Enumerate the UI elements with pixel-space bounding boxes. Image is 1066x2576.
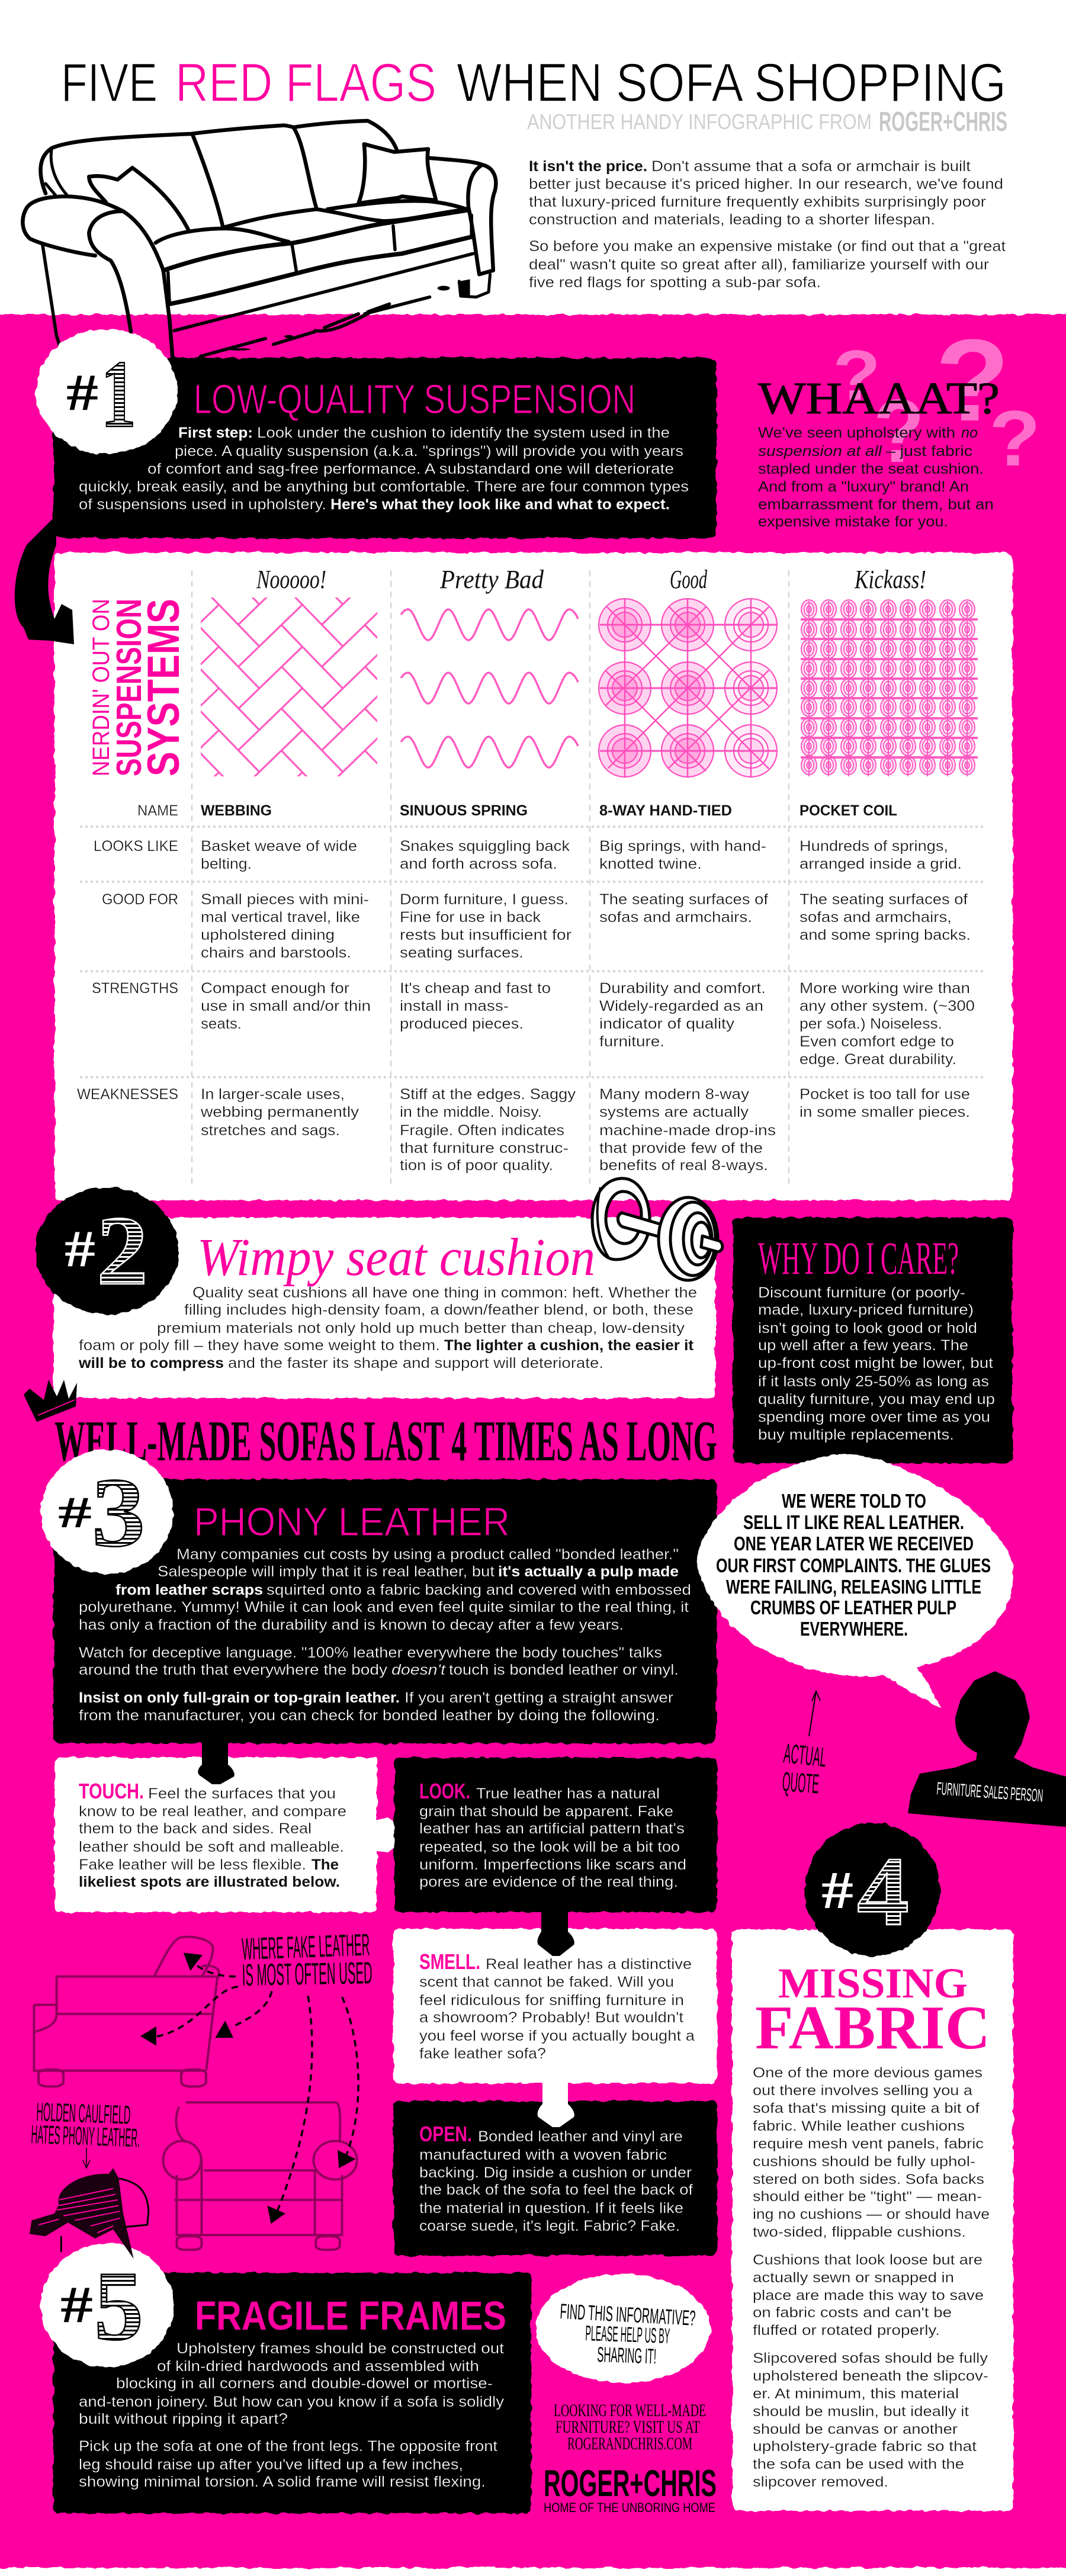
- text block: why do i care: quality furniture, you may end up: [758, 1391, 995, 1408]
- label: where fake leather is most often used: [241, 1928, 373, 1993]
- callout: please share: [535, 2274, 711, 2383]
- text block: look: LOOK.: [419, 1779, 470, 1803]
- text block: missing fabric: fabric. While leather cushions: [753, 2118, 965, 2134]
- table row labels: NAME: [137, 802, 178, 819]
- text block: look: repeated, so the look will be a bit too: [419, 1839, 680, 1855]
- body text: #2: filling includes high-density foam, a down/feather blend, or both, these: [184, 1302, 693, 1318]
- table row labels: STRENGTHS: [92, 980, 178, 997]
- badge: #2: 2: [97, 1196, 148, 1306]
- icon: crown: [24, 1380, 77, 1422]
- body text: #1: of suspensions used in upholstery.: [79, 496, 326, 513]
- text block: touch: know to be real leather, and compare: [79, 1803, 346, 1820]
- text block: missing fabric: [753, 2065, 990, 2490]
- table row labels: WEAKNESSES: [77, 1086, 178, 1103]
- table column: sinuous spring: It's cheap and fast to: [400, 980, 551, 997]
- illustration: pocket coil: [801, 600, 978, 776]
- table column: sinuous spring: in the middle. Noisy.: [400, 1104, 542, 1120]
- badge: #5: [41, 2244, 174, 2367]
- text block: open: the back of the sofa to feel the back of: [419, 2182, 693, 2198]
- body text: #1: Look under the cushion to identify the system used in the: [257, 425, 670, 441]
- table column: pocket coil: Hundreds of springs,: [800, 838, 948, 855]
- text block: why do i care: spending more over time as you: [758, 1409, 990, 1425]
- body text: #5: blocking in all corners and double-dowel or mortise-: [116, 2375, 493, 2392]
- title: FIVE: [61, 53, 158, 113]
- body text: #3: Insist on only full-grain or top-grain leather.: [79, 1690, 400, 1706]
- arrow: actual quote: [809, 1691, 820, 1736]
- logo: roger+chris: HOME OF THE UNBORING HOME: [544, 2500, 715, 2515]
- body text: #5: Upholstery frames should be constructed out: [176, 2340, 504, 2357]
- text block: missing fabric: place are made this way to save: [753, 2288, 984, 2304]
- text block: missing fabric: two-sided, flippable cushions.: [753, 2224, 966, 2240]
- column ratings: Pretty Bad: [439, 565, 544, 594]
- text block: missing fabric: Cushions that look loose but are: [753, 2252, 982, 2268]
- table column: pocket coil: The seating surfaces of: [800, 891, 968, 908]
- icon: sofa illustration: [23, 121, 496, 358]
- panel: #5 fragile frames: [53, 2273, 531, 2513]
- text block: missing fabric: on fabric costs and can't be: [753, 2305, 952, 2321]
- table column: sinuous spring: seating surfaces.: [400, 945, 524, 961]
- text block: why do i care: Discount furniture (or poorly-: [758, 1284, 965, 1301]
- text block: why do i care: up-front cost might be lower, but: [758, 1355, 993, 1371]
- table column: 8-way hand-tied: that provide few of the: [599, 1140, 763, 1157]
- badge: #2: #: [65, 1220, 95, 1278]
- callout: please share: FIND THIS INFORMATIVE?: [560, 2299, 696, 2330]
- text block: missing fabric: should be canvas or another: [753, 2421, 958, 2437]
- text block: whaaat: expensive mistake for you.: [758, 513, 948, 530]
- badge: #3: #: [58, 1488, 92, 1537]
- arrow: smell to open: [538, 2081, 574, 2127]
- intro text: It isn't the price.: [529, 158, 647, 175]
- table row labels: [77, 802, 178, 1103]
- body text: #2: Quality seat cushions all have one thing in common: heft. Whether the: [192, 1284, 697, 1301]
- badge: #3: 3: [92, 1458, 145, 1568]
- panel: #3 phony leather: [53, 1479, 717, 1743]
- panel: smell: [393, 1929, 717, 2083]
- text block: touch: them to the back and sides. Real: [79, 1820, 312, 1837]
- table column: webbing: In larger-scale uses,: [201, 1086, 345, 1103]
- table column: sinuous spring: Fine for use in back: [400, 909, 541, 926]
- text block: open: OPEN.: [419, 2122, 472, 2146]
- panel: #4 missing fabric: [732, 1823, 1013, 2511]
- text block: why do i care: isn't going to look good or hold: [758, 1320, 977, 1337]
- intro text: better just because it's priced higher. In our research, we've found: [529, 176, 1003, 192]
- table column: 8-way hand-tied: systems are actually: [599, 1104, 749, 1120]
- rotated heading: NERDIN' OUT ON: [88, 599, 114, 776]
- body text: #2: [78, 1284, 697, 1371]
- icon: question marks: ?: [874, 381, 924, 481]
- body text: #5: of kiln-dried hardwoods and assembled with: [157, 2358, 479, 2375]
- table column: sinuous spring: [400, 802, 576, 1174]
- text block: whaaat: no: [961, 425, 978, 441]
- text block: open: Bonded leather and vinyl are: [478, 2128, 683, 2145]
- text block: missing fabric: ing no cushions — or should have: [753, 2206, 990, 2222]
- text block: missing fabric: should be muslin, but ideally it: [753, 2404, 969, 2420]
- text block: look: leather has an artificial pattern that's: [419, 1820, 685, 1837]
- heading: fragile frames: FRAGILE FRAMES: [195, 2293, 506, 2339]
- text block: open: the material in question. If it feels like: [419, 2200, 683, 2217]
- intro text: deal" wasn't quite so great after all), familiarize yourself with our: [529, 256, 989, 273]
- body text: #5: Pick up the sofa at one of the front legs. The opposite front: [79, 2438, 497, 2455]
- body text: #5: showing minimal torsion. A solid frame will resist flexing.: [79, 2474, 486, 2490]
- text block: missing fabric: out there involves selling you a: [753, 2083, 973, 2099]
- table column: 8-way hand-tied: [599, 802, 776, 1174]
- table column: sinuous spring: that furniture construc-: [400, 1140, 569, 1157]
- intro text: that luxury-priced furniture frequently exhibits surprisingly poor: [529, 194, 986, 210]
- table row labels: LOOKS LIKE: [94, 838, 178, 855]
- table column: pocket coil: arranged inside a grid.: [800, 856, 962, 872]
- table column: 8-way hand-tied: 8-WAY HAND-TIED: [599, 802, 732, 819]
- subtitle: [527, 106, 1007, 137]
- text block: whaaat: – just fabric: [886, 443, 972, 460]
- table column: pocket coil: in some smaller pieces.: [800, 1104, 970, 1120]
- callout: quote bubble: [697, 1454, 1013, 1708]
- text block: look: True leather has a natural: [476, 1785, 660, 1802]
- text block: look: grain that should be apparent. Fake: [419, 1803, 673, 1820]
- badge: #5: 5: [94, 2251, 143, 2361]
- badge: #1: [36, 329, 178, 454]
- heading: whaaat: WHAAAT?: [758, 374, 1000, 423]
- table column: webbing: webbing permanently: [200, 1104, 359, 1120]
- table column: webbing: upholstered dining: [201, 927, 335, 943]
- text: QUOTE: [781, 1766, 820, 1799]
- heading: low-quality suspension: LOW-QUALITY SUSPENSION: [194, 376, 635, 422]
- text block: missing fabric: upholstered beneath the slipcov-: [753, 2368, 988, 2384]
- text block: open: [419, 2122, 693, 2234]
- table column: webbing: seats.: [201, 1016, 242, 1032]
- text: HATES PHONY LEATHER.: [31, 2120, 140, 2153]
- illustration: sofa side and armchair outlines: [34, 1937, 357, 2250]
- illustration: sinuous spring: [401, 609, 578, 767]
- table column: pocket coil: [800, 802, 975, 1120]
- title: [61, 53, 1006, 113]
- text block: missing fabric: stered on both sides. Sofa backs: [753, 2172, 984, 2188]
- badge: #3: [41, 1450, 174, 1574]
- body text: #5: and-tenon joinery. But how can you know if a sofa is solidly: [79, 2394, 505, 2410]
- badge: #4: #: [821, 1861, 853, 1920]
- table column: sinuous spring: rests but insufficient for: [400, 927, 571, 943]
- rotated heading: [88, 599, 189, 776]
- badge: #1: #: [66, 364, 98, 422]
- text block: smell: scent that cannot be faked. Will you: [419, 1974, 674, 1990]
- body text: #3: around the truth that everywhere the body: [79, 1662, 388, 1678]
- body text: #3: squirted onto a fabric backing and covered with embossed: [266, 1582, 691, 1598]
- intro text: construction and materials, leading to a shorter lifespan.: [529, 211, 935, 228]
- table column: pocket coil: and some spring backs.: [800, 927, 971, 943]
- label: actual quote: [781, 1737, 828, 1799]
- subtitle: ANOTHER HANDY INFOGRAPHIC FROM: [527, 110, 872, 134]
- text block: whaaat: And from a "luxury" brand! An: [758, 478, 969, 495]
- arrow: into touch: [198, 1741, 235, 1784]
- callout: please share: SHARING IT!: [597, 2342, 657, 2368]
- body text: #3: Watch for deceptive language. "100% leather everywhere the body touches" talks: [79, 1644, 662, 1661]
- intro text: [529, 158, 1006, 291]
- body text: #5: [79, 2340, 505, 2490]
- text block: smell: fake leather sofa?: [419, 2045, 546, 2062]
- text block: visit us: ROGERANDCHRIS.COM: [567, 2434, 692, 2453]
- text block: smell: a showroom? Probably! But wouldn't: [419, 2009, 683, 2026]
- table column: pocket coil: per sofa.) Noiseless.: [800, 1016, 942, 1032]
- table column: 8-way hand-tied: indicator of quality: [599, 1016, 735, 1032]
- body text: #1: piece. A quality suspension (a.k.a. "springs") will provide you with years: [175, 443, 683, 460]
- body text: #2: premium materials not only hold up much better than cheap, low-density: [157, 1320, 685, 1337]
- panel: suspension systems table: [54, 499, 1013, 1200]
- text block: missing fabric: require mesh vent panels, fabric: [753, 2136, 984, 2152]
- callout: quote bubble: WERE FAILING, RELEASING LITTLE: [726, 1576, 981, 1598]
- text block: visit us: FURNITURE? VISIT US AT: [556, 2417, 700, 2437]
- body text: #3: has only a fraction of the durability and is known to decay after a few years.: [79, 1617, 624, 1633]
- table column: 8-way hand-tied: sofas and armchairs.: [599, 909, 752, 926]
- text block: look: uniform. Imperfections like scars and: [419, 1856, 686, 1873]
- rotated heading: SUSPENSION: [110, 599, 149, 776]
- text: HOLDEN CAULFIELD: [36, 2098, 131, 2130]
- text block: why do i care: buy multiple replacements.: [758, 1427, 954, 1443]
- heading: missing fabric: FABRIC: [755, 1993, 990, 2062]
- panel: why do i care: [733, 1218, 1013, 1463]
- title: RED FLAGS: [175, 53, 436, 113]
- text block: touch: Feel the surfaces that you: [148, 1785, 336, 1802]
- panel: #1 low-quality suspension: [53, 358, 717, 538]
- icon: salesperson silhouette: [908, 1671, 1066, 1827]
- table column: pocket coil: POCKET COIL: [800, 802, 897, 819]
- arrow: touch to look: [373, 1817, 412, 1852]
- heading: missing fabric: [755, 1960, 990, 2062]
- body text: #3: from the manufacturer, you can check for bonded leather by doing the following.: [79, 1707, 660, 1724]
- callout: quote bubble: SELL IT LIKE REAL LEATHER.: [743, 1511, 964, 1533]
- text block: visit us: LOOKING FOR WELL-MADE: [554, 2401, 706, 2420]
- body text: #3: If you aren't getting a straight answer: [404, 1690, 673, 1706]
- table column: pocket coil: any other system. (~300: [800, 998, 975, 1014]
- text block: whaaat: stapled under the seat cushion.: [758, 461, 984, 477]
- text: WHERE FAKE LEATHER: [241, 1928, 370, 1967]
- table column: sinuous spring: produced pieces.: [400, 1016, 524, 1032]
- text block: whaaat: We've seen upholstery with: [758, 425, 955, 441]
- table column: pocket coil: More working wire than: [800, 980, 970, 997]
- icon: question marks: ?: [935, 315, 1010, 445]
- body text: #3: [79, 1546, 691, 1724]
- column ratings: Nooooo!: [256, 565, 326, 594]
- column ratings: Kickass!: [854, 565, 926, 594]
- text block: missing fabric: er. At minimum, this material: [753, 2386, 959, 2402]
- body text: #3: from leather scraps: [115, 1582, 263, 1598]
- text block: missing fabric: slipcover removed.: [753, 2474, 888, 2490]
- body text: #5: leg should raise up after you've lifted up a few inches,: [79, 2456, 463, 2473]
- body text: #2: will be to compress: [78, 1355, 224, 1371]
- text block: missing fabric: Slipcovered sofas should be fully: [753, 2350, 988, 2366]
- body text: #5: built without ripping it apart?: [79, 2411, 288, 2427]
- text block: touch: The: [312, 1856, 339, 1873]
- text block: why do i care: up well after a few years. The: [758, 1337, 968, 1354]
- text block: why do i care: made, luxury-priced furniture): [758, 1302, 974, 1318]
- table column: webbing: Compact enough for: [201, 980, 349, 997]
- body text: #2: and the faster its shape and support will deteriorate.: [228, 1355, 603, 1371]
- body text: #3: touch is bonded leather or vinyl.: [449, 1662, 679, 1678]
- text: ACTUAL: [782, 1737, 828, 1772]
- table column: webbing: chairs and barstools.: [201, 945, 351, 961]
- text block: open: manufactured with a woven fabric: [419, 2147, 667, 2163]
- logo: roger+chris: [544, 2463, 717, 2515]
- intro text: Don't assume that a sofa or armchair is built: [651, 158, 971, 175]
- text block: look: [419, 1779, 686, 1890]
- text block: why do i care: [758, 1284, 995, 1443]
- table column: sinuous spring: Fragile. Often indicates: [400, 1122, 564, 1139]
- table column: webbing: [200, 802, 371, 1139]
- heading: wimpy seat cushion: Wimpy seat cushion: [197, 1228, 595, 1287]
- table column: 8-way hand-tied: Widely-regarded as an: [599, 998, 763, 1014]
- panel: open: [393, 2101, 717, 2256]
- table column: sinuous spring: SINUOUS SPRING: [400, 802, 528, 819]
- body text: #1: quickly, break easily, and be anything but comfortable. There are four common types: [79, 478, 689, 495]
- text block: whaaat: suspension at all: [758, 443, 883, 460]
- badge: #4: [805, 1823, 940, 1956]
- text block: touch: leather should be soft and malleable.: [79, 1839, 344, 1855]
- text block: touch: TOUCH.: [79, 1779, 144, 1803]
- callout: quote bubble: WE WERE TOLD TO: [782, 1490, 926, 1512]
- arrow: look to smell: [538, 1910, 574, 1956]
- illustration: 8-way hand-tied: [599, 599, 778, 777]
- callout: quote bubble: CRUMBS OF LEATHER PULP: [750, 1597, 956, 1618]
- table column: webbing: mal vertical travel, like: [201, 909, 360, 926]
- icon: question marks: ?: [833, 336, 881, 415]
- label: holden caulfield: [31, 2098, 140, 2168]
- heading: missing fabric: MISSING: [778, 1960, 968, 2007]
- column ratings: [256, 565, 926, 594]
- callout: quote bubble: ONE YEAR LATER WE RECEIVED: [734, 1533, 974, 1554]
- text block: whaaat: [758, 425, 994, 530]
- table column: pocket coil: Even comfort edge to: [800, 1033, 954, 1050]
- badge: #5: #: [60, 2276, 93, 2334]
- text block: look: pores are evidence of the real thing.: [419, 1874, 678, 1890]
- table column: sinuous spring: tion is of poor quality.: [400, 1157, 553, 1174]
- table column: sinuous spring: Snakes squiggling back: [400, 838, 570, 855]
- text block: smell: [419, 1949, 695, 2062]
- text block: whaaat: embarrassment for them, but an: [758, 496, 994, 513]
- icon: question marks: ?: [989, 395, 1041, 483]
- icon: dumbbell: [592, 1178, 723, 1280]
- icon: question marks: [833, 315, 1041, 483]
- table column: webbing: belting.: [201, 856, 252, 872]
- badge: #1: 1: [101, 341, 136, 448]
- text block: missing fabric: cushions should be fully uphol-: [753, 2154, 975, 2170]
- text block: why do i care: if it lasts only 25-50% as long as: [758, 1373, 989, 1390]
- table column: webbing: Small pieces with mini-: [201, 891, 369, 908]
- column ratings: Good: [670, 565, 708, 594]
- text block: missing fabric: fluffed or rotated properly.: [753, 2323, 940, 2339]
- table column: sinuous spring: and forth across sofa.: [400, 856, 557, 872]
- text block: missing fabric: the sofa can be used with the: [753, 2456, 964, 2472]
- text block: smell: you feel worse if you actually bought a: [419, 2028, 695, 2044]
- table column: 8-way hand-tied: Many modern 8-way: [599, 1086, 750, 1103]
- body text: #3: it's actually a pulp made: [498, 1563, 679, 1580]
- arrow: from #1 to table: [15, 515, 74, 644]
- table column: webbing: WEBBING: [201, 802, 272, 819]
- logo: roger+chris: ROGER+CHRIS: [544, 2463, 717, 2504]
- text: IS MOST OFTEN USED: [242, 1956, 373, 1993]
- rotated heading: SYSTEMS: [139, 599, 189, 776]
- text block: smell: feel ridiculous for sniffing furniture in: [419, 1992, 684, 2009]
- panel: #2 wimpy seat cushion: [53, 1218, 715, 1398]
- illustration: webbing: [201, 598, 377, 776]
- intro text: five red flags for spotting a sub-par sofa.: [529, 274, 821, 291]
- table column: sinuous spring: Dorm furniture, I guess.: [400, 891, 569, 908]
- table column: 8-way hand-tied: Big springs, with hand-: [599, 838, 766, 855]
- body text: #2: The lighter a cushion, the easier it: [444, 1337, 694, 1354]
- text block: missing fabric: One of the more devious games: [753, 2065, 982, 2081]
- heading: phony leather: PHONY LEATHER: [194, 1499, 510, 1544]
- table column: pocket coil: sofas and armchairs,: [800, 909, 952, 926]
- body text: #1: [79, 425, 689, 513]
- panel: look: [394, 1758, 717, 1912]
- table column: webbing: use in small and/or thin: [201, 998, 371, 1014]
- table column: 8-way hand-tied: furniture.: [599, 1033, 664, 1050]
- body text: #1: Here's what they look like and what to expect.: [330, 496, 670, 513]
- text block: smell: SMELL.: [419, 1949, 480, 1974]
- badge: #2: [36, 1187, 179, 1314]
- table column: sinuous spring: Stiff at the edges. Saggy: [400, 1086, 576, 1103]
- text block: touch: [79, 1779, 346, 1890]
- table column: webbing: stretches and sags.: [201, 1122, 340, 1139]
- body text: #3: Many companies cut costs by using a product called "bonded leather.": [176, 1546, 679, 1563]
- body text: #3: Salespeople will imply that it is real leather, but: [158, 1563, 495, 1580]
- text block: touch: likeliest spots are illustrated below.: [79, 1874, 340, 1890]
- callout: quote bubble: EVERYWHERE.: [800, 1618, 908, 1640]
- table row labels: GOOD FOR: [102, 891, 178, 908]
- body text: #1: First step:: [178, 425, 253, 441]
- table column: pocket coil: Pocket is too tall for use: [800, 1086, 970, 1103]
- table column: pocket coil: edge. Great durability.: [800, 1051, 956, 1068]
- arrows: where fake leather is used: [140, 1952, 358, 2224]
- text block: open: backing. Dig inside a cushion or under: [419, 2164, 692, 2181]
- text block: visit us: [554, 2401, 706, 2453]
- badge: #4: 4: [857, 1837, 909, 1947]
- panel: touch: [54, 1758, 377, 1912]
- callout: please share: PLEASE HELP US BY: [585, 2321, 670, 2348]
- table column: 8-way hand-tied: knotted twine.: [599, 856, 702, 872]
- icon: hat: [30, 2168, 149, 2259]
- table column: sinuous spring: install in mass-: [400, 998, 509, 1014]
- text block: touch: Fake leather will be less flexible.: [79, 1856, 306, 1873]
- table column: webbing: Basket weave of wide: [201, 838, 357, 855]
- text block: missing fabric: sofa that's missing quite a bit of: [753, 2100, 980, 2116]
- table column: 8-way hand-tied: benefits of real 8-ways.: [599, 1157, 768, 1174]
- text block: smell: Real leather has a distinctive: [486, 1956, 692, 1973]
- title: WHEN SOFA SHOPPING: [457, 53, 1006, 113]
- body text: #1: of comfort and sag-free performance. A substandard one will deteriorate: [147, 461, 674, 477]
- body text: #3: doesn't: [391, 1662, 446, 1678]
- intro text: So before you make an expensive mistake (or find out that a "great: [529, 238, 1006, 255]
- text block: missing fabric: should either be "tight" — mean-: [753, 2189, 982, 2205]
- body text: #3: polyurethane. Yummy! While it can look and even feel quite similar to the real thing, it: [79, 1599, 689, 1615]
- table column: 8-way hand-tied: The seating surfaces of: [599, 891, 768, 908]
- body text: #2: foam or poly fill – they have some weight to them.: [79, 1337, 440, 1354]
- table column: 8-way hand-tied: Durability and comfort.: [599, 980, 766, 997]
- text block: missing fabric: actually sewn or snapped in: [753, 2270, 954, 2286]
- table column: 8-way hand-tied: machine-made drop-ins: [599, 1122, 776, 1139]
- text block: open: coarse suede, it's legit. Fabric? Fake.: [419, 2218, 680, 2234]
- text block: missing fabric: upholstery-grade fabric so that: [753, 2439, 977, 2455]
